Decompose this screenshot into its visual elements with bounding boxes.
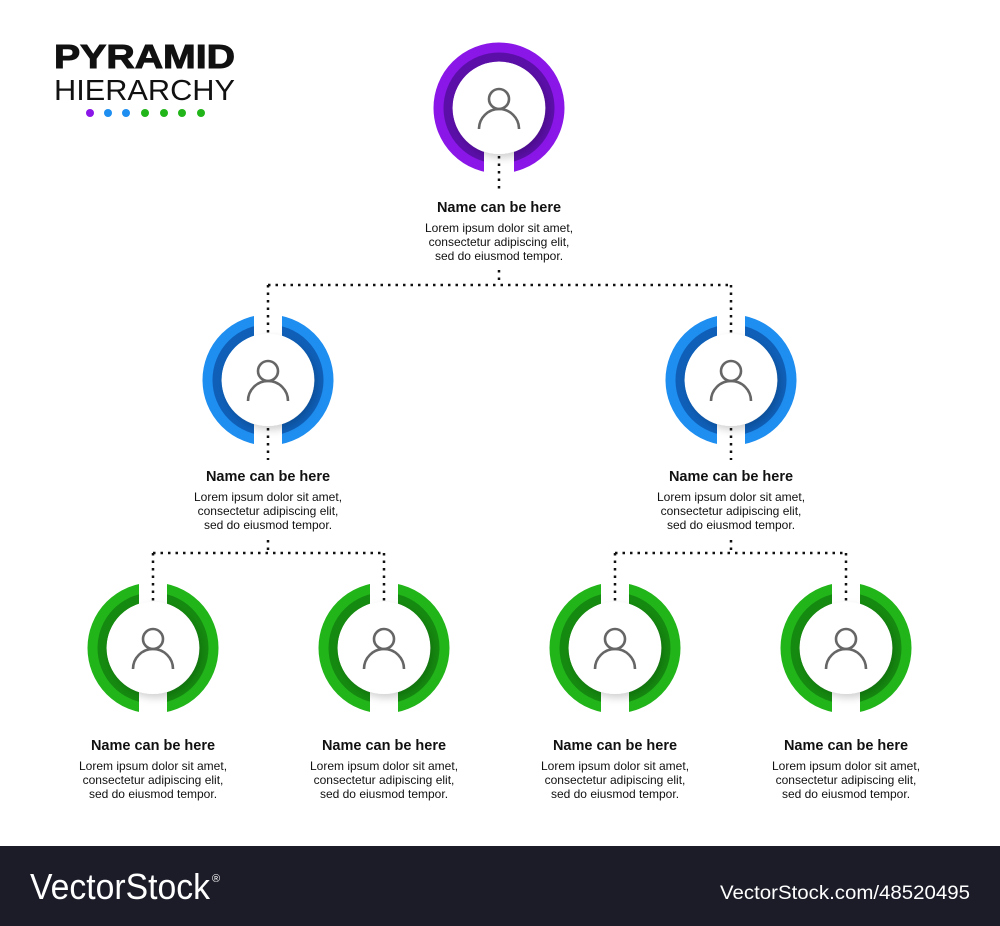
footer: VectorStock bbox=[30, 866, 211, 907]
label: bottom 1: consectetur adipiscing elit, bbox=[83, 773, 223, 787]
title bbox=[54, 38, 235, 117]
label: bottom 2: sed do eiusmod tempor. bbox=[320, 787, 448, 801]
label: bottom 2: Lorem ipsum dolor sit amet, bbox=[310, 759, 458, 773]
label: mid left: consectetur adipiscing elit, bbox=[198, 504, 338, 518]
node: bottom 4 bbox=[790, 578, 902, 718]
label: top bbox=[425, 200, 573, 263]
label: bottom 1: Name can be here bbox=[91, 738, 215, 754]
node: bottom 1 bbox=[97, 578, 209, 718]
node: top bbox=[443, 52, 555, 178]
label: bottom 2: consectetur adipiscing elit, bbox=[314, 773, 454, 787]
node: bottom 3 bbox=[559, 578, 671, 718]
node: mid left bbox=[212, 310, 324, 450]
title: HIERARCHY bbox=[54, 75, 235, 107]
label: bottom 1: sed do eiusmod tempor. bbox=[89, 787, 217, 801]
label: bottom 3 bbox=[541, 738, 689, 801]
node: mid right bbox=[675, 310, 787, 450]
label: top: Lorem ipsum dolor sit amet, bbox=[425, 221, 573, 235]
label: top: sed do eiusmod tempor. bbox=[435, 249, 563, 263]
node: bottom 2 bbox=[328, 578, 440, 718]
label: mid left: Name can be here bbox=[206, 469, 330, 485]
label: bottom 3: consectetur adipiscing elit, bbox=[545, 773, 685, 787]
label: bottom 3: Name can be here bbox=[553, 738, 677, 754]
label: mid left: Lorem ipsum dolor sit amet, bbox=[194, 490, 342, 504]
connectors bbox=[153, 156, 846, 602]
footer bbox=[0, 846, 1000, 926]
label: mid right bbox=[657, 469, 805, 532]
label: mid left: sed do eiusmod tempor. bbox=[204, 518, 332, 532]
label: mid right: sed do eiusmod tempor. bbox=[667, 518, 795, 532]
label: top: Name can be here bbox=[437, 200, 561, 216]
label: mid left bbox=[194, 469, 342, 532]
label: mid right: Name can be here bbox=[669, 469, 793, 485]
label: bottom 1 bbox=[79, 738, 227, 801]
label: bottom 4: Lorem ipsum dolor sit amet, bbox=[772, 759, 920, 773]
label: bottom 2: Name can be here bbox=[322, 738, 446, 754]
label: bottom 4 bbox=[772, 738, 920, 801]
label: bottom 4: consectetur adipiscing elit, bbox=[776, 773, 916, 787]
footer: ® bbox=[212, 873, 220, 885]
label: bottom 4: sed do eiusmod tempor. bbox=[782, 787, 910, 801]
label: bottom 1: Lorem ipsum dolor sit amet, bbox=[79, 759, 227, 773]
label: mid right: consectetur adipiscing elit, bbox=[661, 504, 801, 518]
label: mid right: Lorem ipsum dolor sit amet, bbox=[657, 490, 805, 504]
label: bottom 3: Lorem ipsum dolor sit amet, bbox=[541, 759, 689, 773]
label: top: consectetur adipiscing elit, bbox=[429, 235, 569, 249]
label: bottom 3: sed do eiusmod tempor. bbox=[551, 787, 679, 801]
footer: VectorStock.com/48520495 bbox=[720, 883, 970, 904]
title: PYRAMID bbox=[54, 38, 235, 75]
label: bottom 2 bbox=[310, 738, 458, 801]
label: bottom 4: Name can be here bbox=[784, 738, 908, 754]
